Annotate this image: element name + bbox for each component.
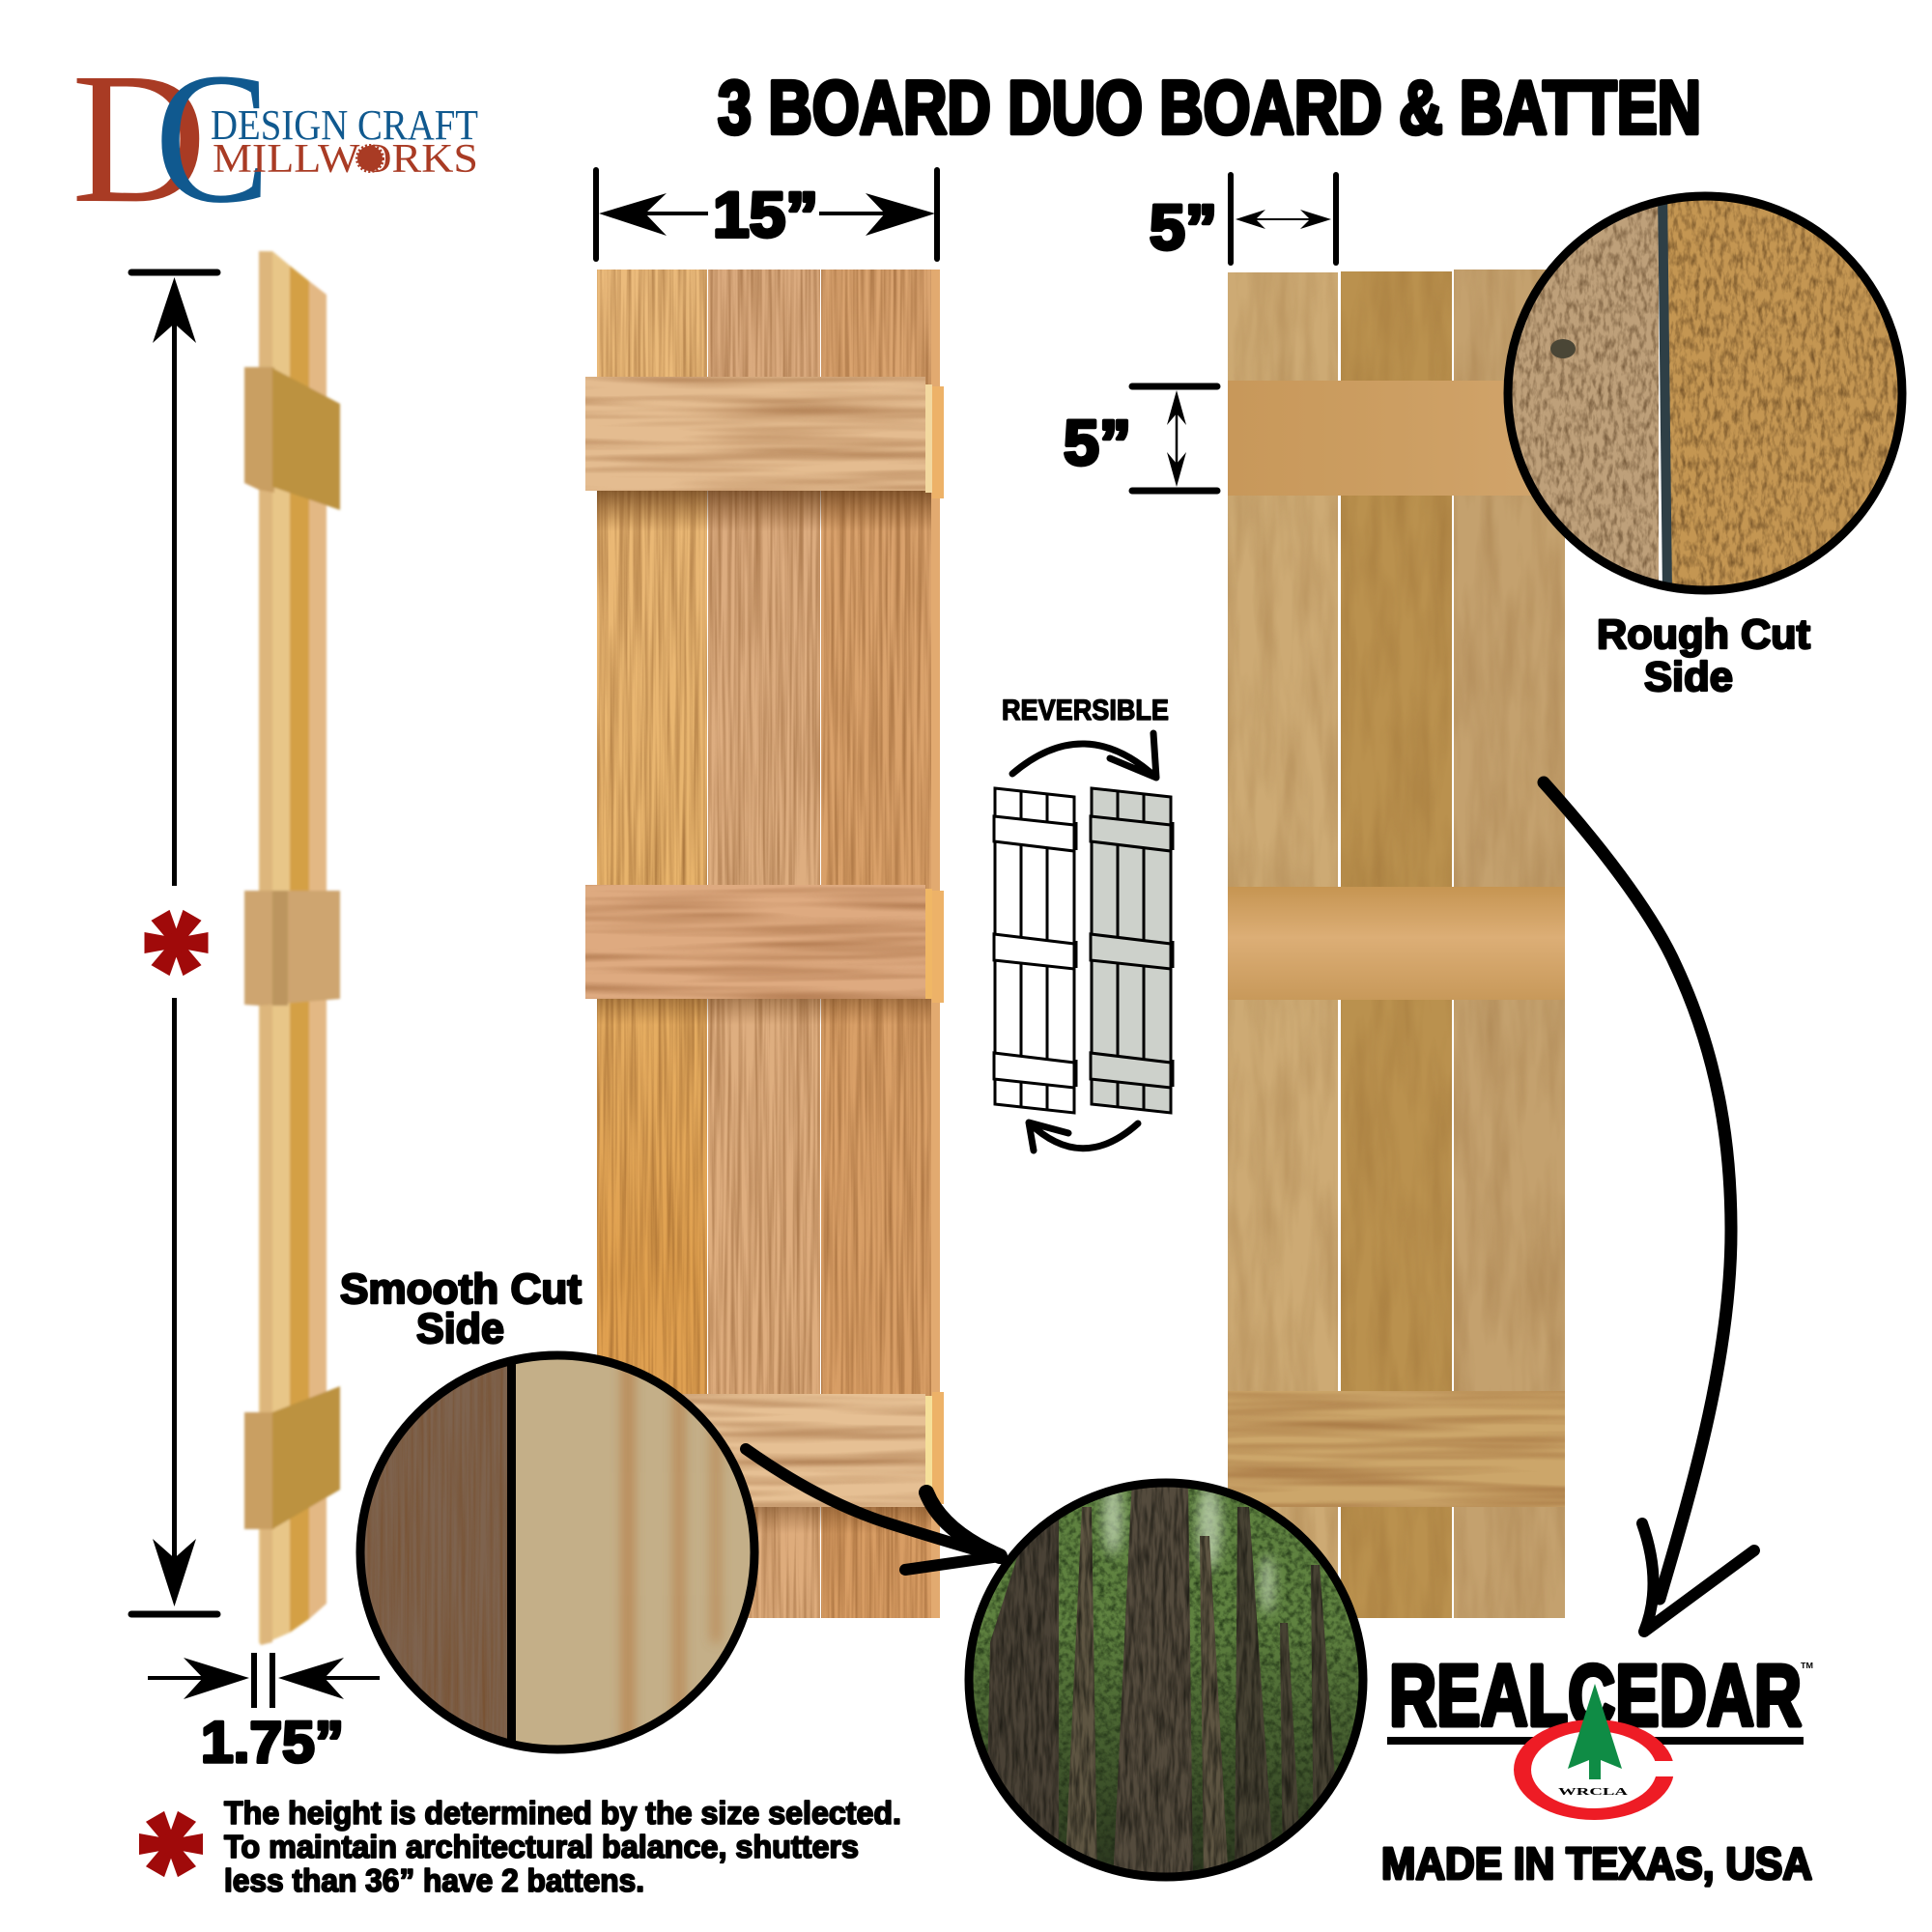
grey shutter icon [1091, 788, 1172, 1113]
smooth cut detail circle [357, 1352, 763, 1753]
footnote text: To maintain architectural balance, shutters [224, 1829, 859, 1864]
front bottom batten [585, 1392, 944, 1507]
back board left [1228, 272, 1338, 1618]
side boards [259, 251, 327, 1645]
rough divider gap [1658, 188, 1672, 594]
forest circle outline [969, 1483, 1363, 1877]
back top batten [1228, 381, 1565, 496]
side view shutter [244, 251, 340, 1645]
front board edge [931, 270, 940, 1618]
thickness value: 1.75” [201, 1710, 344, 1775]
smooth circle outline [360, 1355, 754, 1749]
reversible label: REVERSIBLE [1002, 695, 1169, 726]
batten height dimension 5 inch [1064, 386, 1217, 491]
logo monogram C: C [155, 34, 270, 242]
width value: 15” [713, 179, 818, 250]
board width dimension 5 inch [1150, 175, 1336, 263]
wood knot [1550, 339, 1576, 358]
smooth cut label [340, 1265, 582, 1352]
forest tree trunks [985, 1478, 1343, 1884]
board width value: 5” [1150, 191, 1217, 263]
logo saw blade [357, 146, 383, 171]
footnote asterisk [139, 1811, 203, 1877]
footnote text [224, 1795, 901, 1898]
rough cut label [1597, 611, 1810, 700]
title: 3 BOARD DUO BOARD & BATTEN [718, 65, 1701, 150]
footnote text: less than 36” have 2 battens. [224, 1862, 644, 1898]
rough circle outline [1508, 196, 1902, 590]
front shutter smooth side [585, 270, 944, 1618]
footnote text: The height is determined by the size selected. [224, 1795, 901, 1831]
back board middle [1341, 271, 1452, 1618]
back board right [1454, 270, 1565, 1618]
flip arrow top [1012, 733, 1156, 778]
flip arrow bottom [1029, 1122, 1138, 1151]
smooth grain streaks [622, 1352, 720, 1753]
reversible diagram [994, 695, 1172, 1151]
forest floor shadow [974, 1651, 1358, 1870]
smooth cut label: Smooth Cut [340, 1265, 582, 1313]
smooth cut label: Side [416, 1305, 504, 1352]
side top batten [244, 367, 340, 510]
real cedar logo [1387, 1648, 1813, 1820]
red asterisk on height line [145, 910, 209, 976]
trademark: TM [1801, 1662, 1813, 1670]
thickness dimension 1.75 inch [148, 1653, 380, 1775]
forest canopy [966, 1478, 1367, 1884]
real cedar underline [1387, 1737, 1804, 1745]
back middle batten [1228, 887, 1565, 1000]
smooth divider gap [507, 1352, 516, 1753]
green tree [1568, 1684, 1622, 1779]
red C emblem [1514, 1719, 1677, 1820]
width dimension 15 inch [596, 170, 937, 259]
batten shadows [597, 488, 931, 1534]
logo wordmark millworks: MILLWORKS [213, 137, 478, 182]
rough left board [1513, 207, 1659, 581]
smooth left board [365, 1366, 507, 1739]
company logo [71, 34, 478, 242]
made in texas: MADE IN TEXAS, USA [1381, 1838, 1812, 1889]
smooth right board [516, 1360, 750, 1745]
sky patches [1103, 1478, 1274, 1613]
arrow smooth side to forest [746, 1449, 1000, 1570]
front board middle [708, 270, 820, 1618]
arrow rough side to logo [1544, 782, 1754, 1632]
rough right board [1667, 188, 1909, 594]
back shutter rough side [1228, 270, 1565, 1618]
wrcla text: WRCLA [1558, 1786, 1628, 1798]
front top batten [585, 377, 944, 498]
rough cut label: Side [1644, 654, 1733, 700]
batten height value: 5” [1064, 407, 1131, 478]
white shutter icon [994, 788, 1075, 1113]
height dimension arrow [131, 272, 217, 1614]
front board right [821, 270, 931, 1618]
logo monogram D: D [71, 34, 207, 242]
back bottom batten [1228, 1391, 1565, 1507]
real cedar wordmark: REALCEDAR [1389, 1648, 1802, 1745]
front middle batten [585, 885, 944, 1003]
logo wordmark design craft: DESIGN CRAFT [211, 101, 478, 149]
side middle batten [244, 891, 340, 1006]
side bottom batten [244, 1386, 340, 1529]
rough cut detail circle [1502, 188, 1909, 594]
front board left [597, 270, 707, 1618]
cedar forest photo circle [966, 1478, 1367, 1884]
rough cut label: Rough Cut [1597, 611, 1810, 658]
